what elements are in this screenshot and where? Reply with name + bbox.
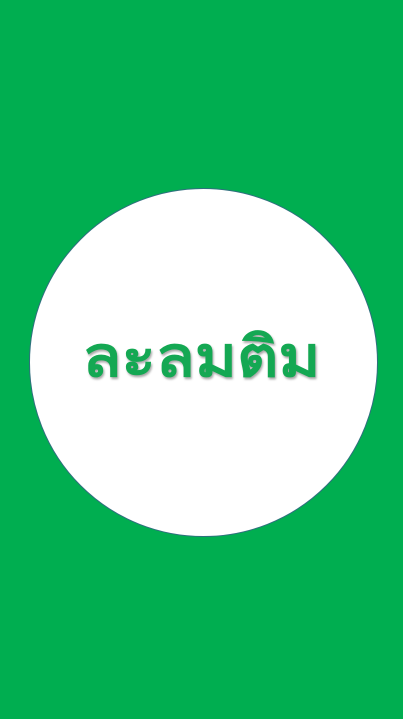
title: ละลมติม xyxy=(82,325,321,388)
white circle xyxy=(28,188,378,537)
